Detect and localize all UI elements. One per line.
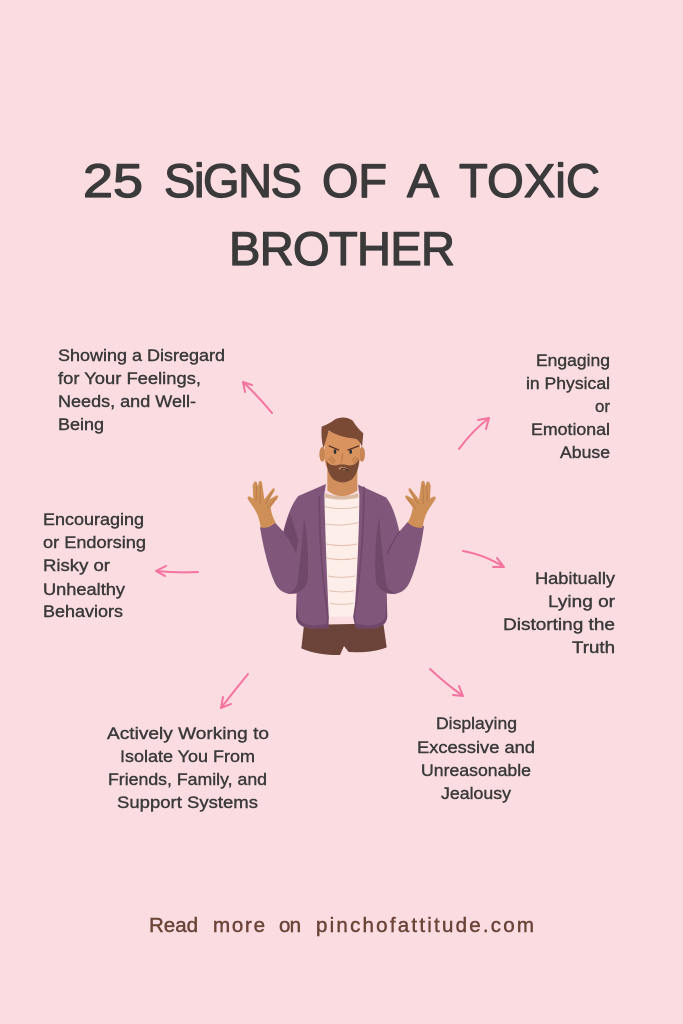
right hand <box>405 481 436 528</box>
text: physical or emotional abuse: or <box>595 397 610 416</box>
text: risky behaviors: or Endorsing <box>43 533 146 552</box>
cardigan shading <box>283 513 397 629</box>
text: isolation: Friends, Family, and <box>108 770 267 789</box>
arrow: to risky behaviors <box>156 566 198 576</box>
arrow: to disregard <box>243 382 272 413</box>
footer: source link: on <box>279 914 301 937</box>
title: TOXiC <box>459 154 600 207</box>
footer: source link <box>149 914 534 937</box>
arrow: to jealousy <box>430 669 463 696</box>
text: disregard for feelings: for Your Feelings, <box>58 369 201 388</box>
title: A <box>407 154 440 207</box>
text: lying <box>503 569 616 657</box>
text: physical or emotional abuse: Emotional <box>531 420 610 439</box>
text: risky behaviors: Unhealthy <box>43 580 126 599</box>
neck <box>327 468 357 496</box>
title: OF <box>322 154 387 207</box>
text: isolation <box>107 724 269 812</box>
text: lying: Habitually <box>535 569 616 588</box>
arrow: to isolation <box>221 674 248 708</box>
footer: source link: more <box>213 914 265 937</box>
cardigan <box>260 484 424 629</box>
text: jealousy: Unreasonable <box>421 761 531 780</box>
title: SiGNS <box>164 154 302 207</box>
text: risky behaviors: Encouraging <box>43 510 144 529</box>
left hand <box>248 481 278 528</box>
text: jealousy: Excessive and <box>417 738 535 757</box>
text: lying: Distorting the <box>503 615 615 634</box>
text: physical or emotional abuse: Engaging <box>536 351 610 370</box>
title: BROTHER <box>229 222 455 275</box>
text: disregard for feelings: Being <box>58 415 104 434</box>
text: jealousy: Jealousy <box>441 784 512 803</box>
text: disregard for feelings <box>58 346 225 434</box>
text: physical or emotional abuse <box>526 351 610 462</box>
text: jealousy <box>417 714 535 803</box>
text: physical or emotional abuse: Abuse <box>560 443 610 462</box>
text: lying: Lying or <box>548 592 615 611</box>
arrow: to lying <box>463 551 504 567</box>
text: isolation: Isolate You From <box>120 747 255 766</box>
shirt <box>324 493 359 617</box>
title <box>83 154 600 275</box>
head <box>319 417 365 482</box>
text: risky behaviors: Behaviors <box>43 602 123 621</box>
text: risky behaviors <box>43 510 146 621</box>
arrow: to abuse <box>459 418 489 449</box>
footer: source link: pinchofattitude.com <box>316 914 534 937</box>
illustration: angry man <box>248 417 436 655</box>
text: isolation: Support Systems <box>117 793 258 812</box>
text: physical or emotional abuse: in Physical <box>526 374 610 393</box>
text: lying: Truth <box>572 638 615 657</box>
text: disregard for feelings: Showing a Disregard <box>58 346 225 365</box>
text: isolation: Actively Working to <box>107 724 269 743</box>
shorts <box>301 623 387 655</box>
text: jealousy: Displaying <box>436 714 517 733</box>
title: 25 <box>83 154 143 207</box>
footer: source link: Read <box>149 914 198 937</box>
text: disregard for feelings: Needs, and Well- <box>58 392 196 411</box>
text: risky behaviors: Risky or <box>43 556 110 575</box>
